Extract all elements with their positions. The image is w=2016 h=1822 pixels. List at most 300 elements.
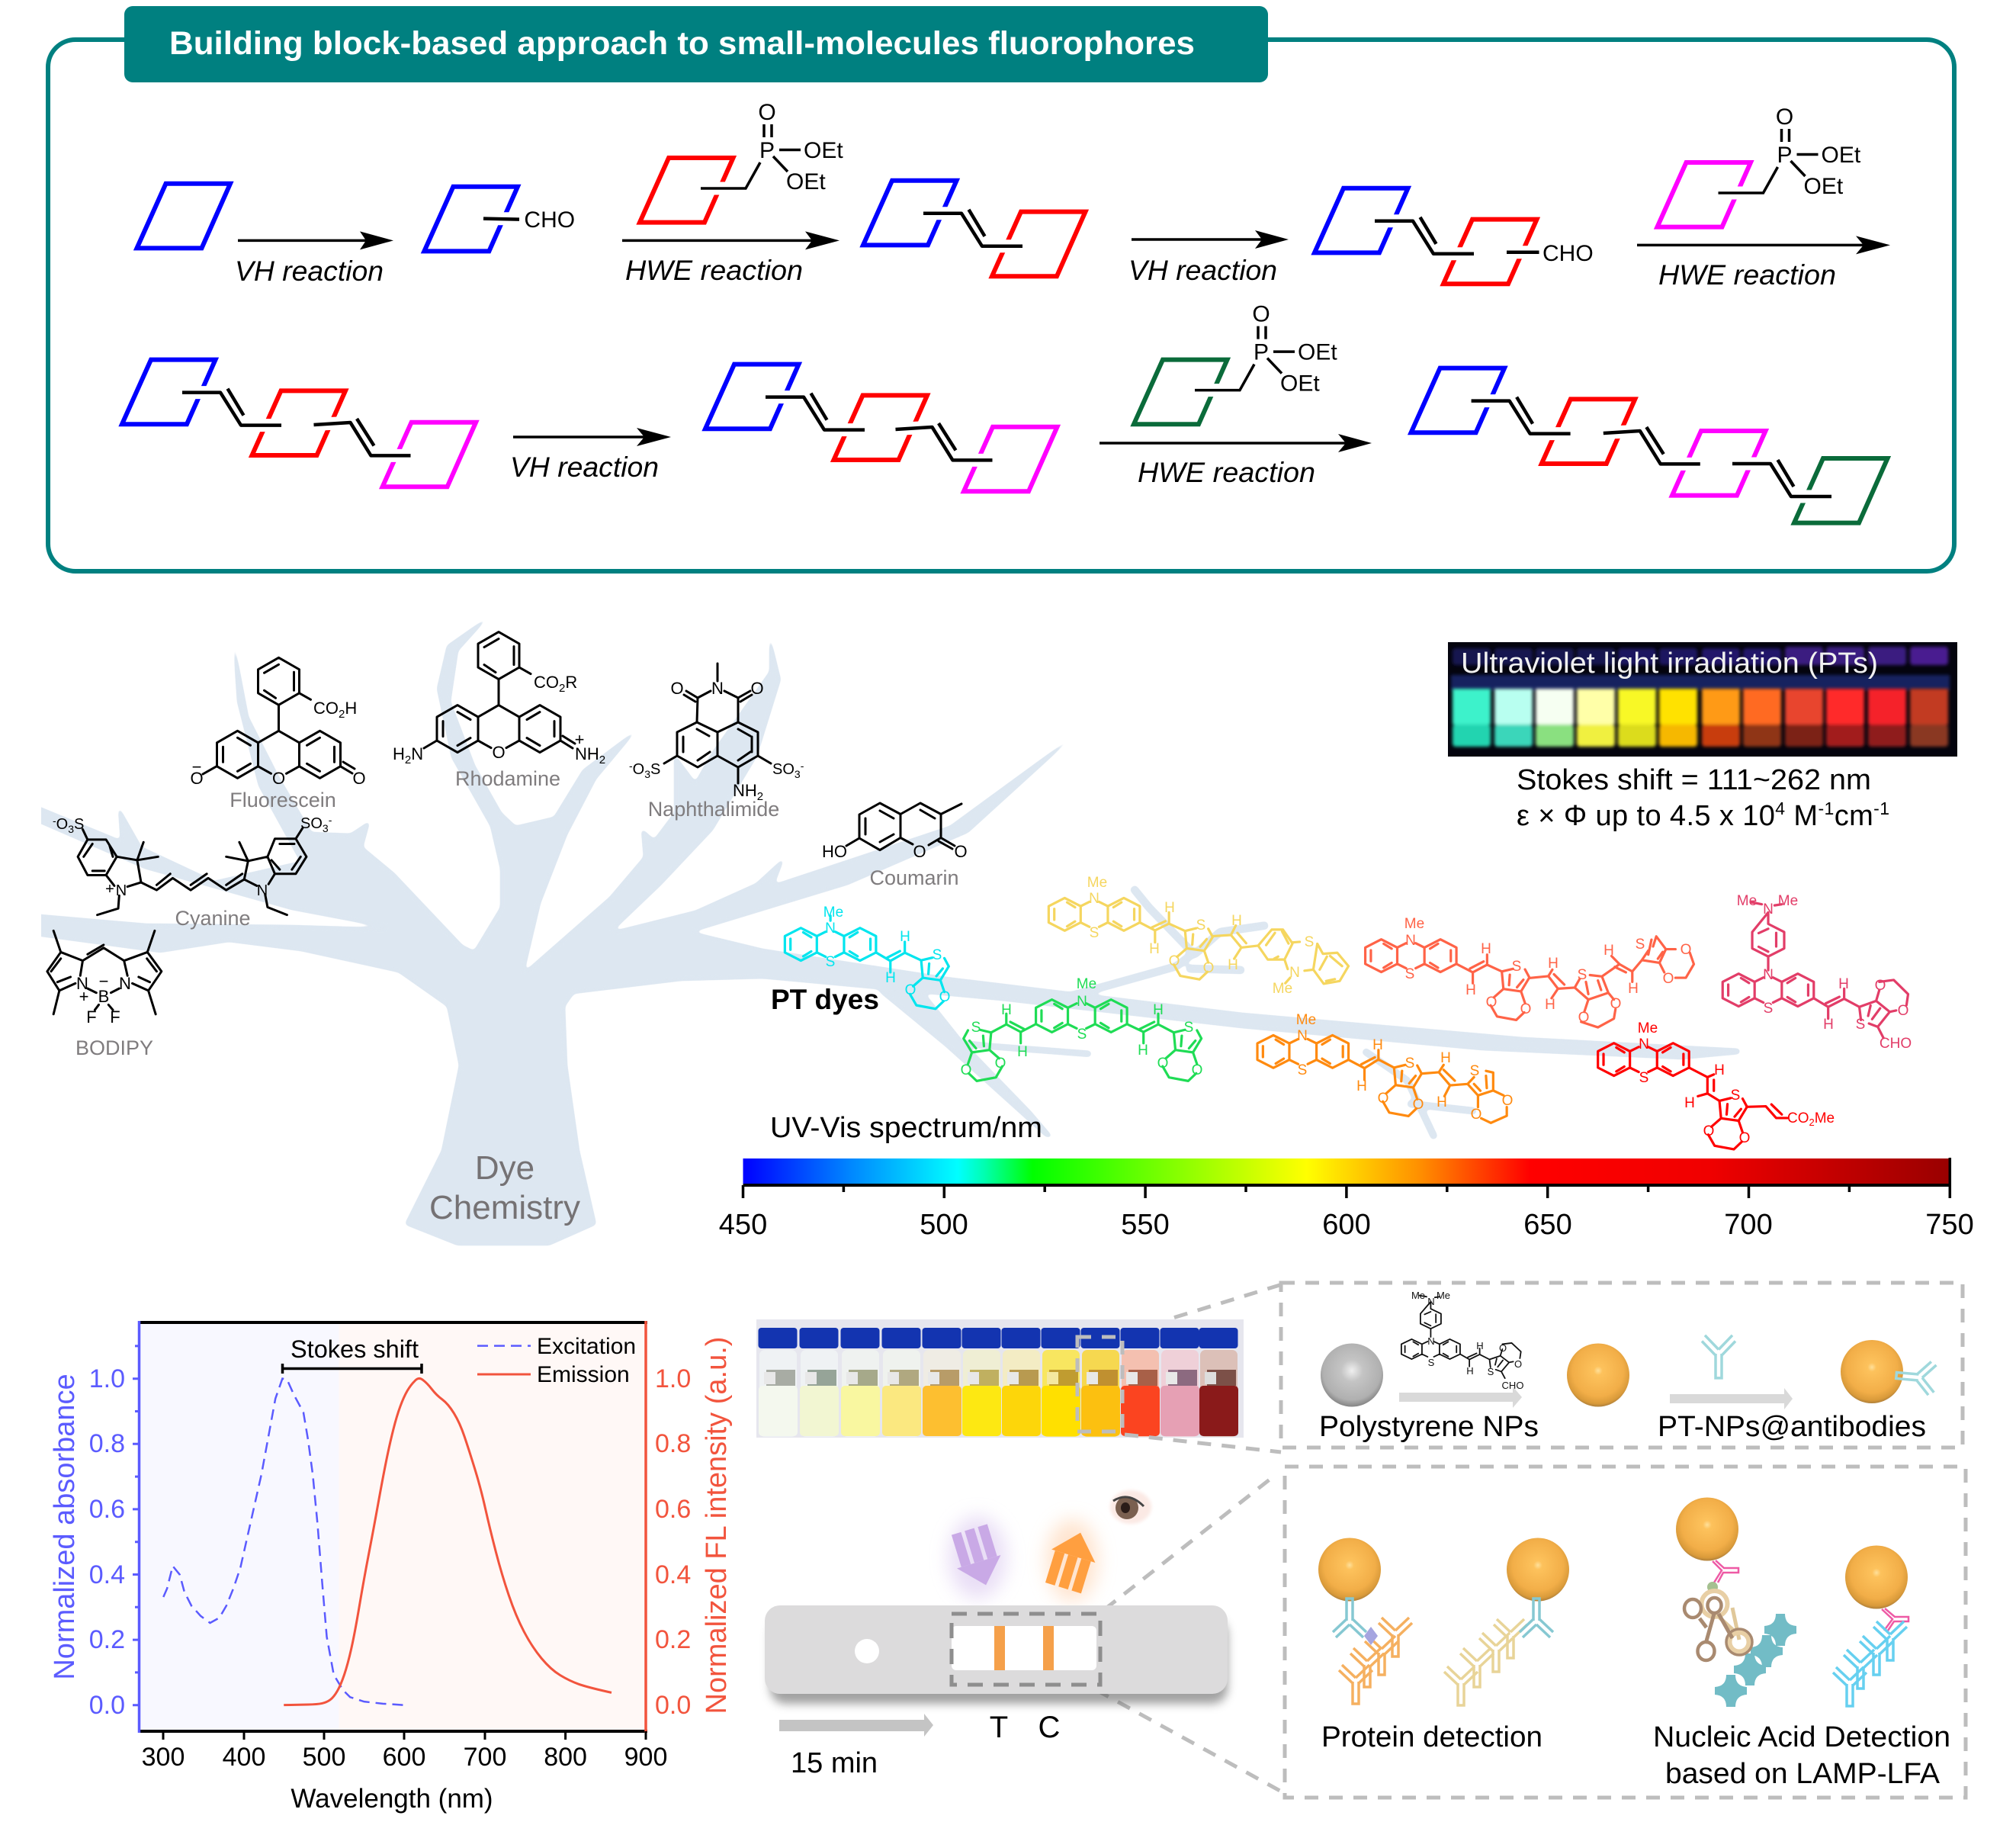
photo: vials under daylight [756,1319,1244,1438]
panel: nanoparticle preparation: PT-NPs@antibodies [1658,1411,1926,1443]
PT dye: yellow: H [1164,900,1175,916]
phosphonate reagent magenta [1658,104,1861,227]
test strip [765,1605,1228,1704]
panel: detection modes: Nucleic Acid Detection [1653,1721,1950,1753]
mini PT molecule: N [1427,1335,1435,1347]
PT dye: tomato: H [1628,981,1639,997]
molecule: cyanine: - [53,815,56,827]
phosphonate reagent green: OEt [1280,371,1320,397]
phosphonate reagent green [1134,302,1337,424]
legend [477,1334,636,1387]
PT dye: green: S [971,1020,981,1036]
arrow: HWE reaction 2: HWE reaction [1658,259,1836,291]
molecule: coumarin: O [954,842,968,861]
arrow: HWE reaction 3: HWE reaction [1138,457,1315,488]
left axis labels: 0.4 [89,1560,125,1589]
molecule: cyanine: Cyanine [175,907,251,930]
x axis labels: 800 [544,1743,587,1772]
PT dye: tomato: H [1548,956,1559,972]
x axis labels: 600 [383,1743,425,1772]
LAMP-LFA assemblies [1676,1498,1908,1707]
vial glass and liquid [759,1350,1238,1437]
PT dye: cyan: Me [823,905,843,921]
molecule: BODIPY: − [99,972,108,991]
PT dye: orange: N [1297,1028,1308,1044]
PT dye: yellow: S [1090,925,1099,941]
molecule: naphthalimide: - [801,760,804,772]
PT dye: green [961,976,1202,1081]
PT dye: green: S [1184,1020,1193,1036]
PT dye: yellow: O [1169,953,1180,969]
mini PT molecule [1401,1290,1523,1391]
panel: detection modes: Protein detection [1321,1721,1542,1753]
PT dye: red: N [1639,1036,1649,1052]
aldehyde block [424,187,575,251]
molecule: fluorescein: Fluorescein [230,789,336,811]
molecule: rhodamine: R [565,673,577,692]
text: photophysical data: 4 [1775,799,1785,818]
legend: Emission [537,1362,630,1387]
x axis labels: 300 [142,1743,185,1772]
PT dye: tomato: H [1603,943,1614,959]
panel: detection modes: based on LAMP-LFA [1665,1758,1941,1790]
PT dye: green: N [1077,994,1087,1010]
molecule: fluorescein: H [345,699,357,718]
colour bar scale: 750 [1925,1209,1974,1241]
arrow: HWE reaction 1 [622,231,839,286]
PT dye: orange: H [1356,1078,1367,1094]
PT dye: yellow: H [1149,941,1160,957]
control line C [1043,1626,1054,1670]
molecule: fluorescein [190,657,366,811]
PT dye: crimson: Me [1737,893,1757,909]
arrow: VH reaction 1 [235,231,393,287]
PT dye: crimson: H [1838,976,1849,992]
mini PT molecule: O [1499,1342,1507,1354]
PT dye: tomato: O [1681,942,1691,958]
arrow: VH reaction 3 [510,428,671,483]
glowing vials [1453,689,1948,747]
PT dye: cyan: S [826,954,835,970]
trimer [122,360,476,487]
molecule: naphthalimide: N [711,679,724,698]
LAMP product loops [1684,1591,1752,1660]
molecule: BODIPY: B [98,987,109,1006]
PT dye: green: O [995,1056,1006,1072]
label: Dye Chemistry: Chemistry [429,1189,580,1226]
PT dye: cyan [785,905,950,1009]
PT dye: tomato: S [1405,966,1414,982]
arrow: HWE reaction 3 [1099,434,1372,488]
PT dye: orange: S [1470,1063,1479,1079]
molecule: rhodamine: N [411,744,423,763]
right axis labels [655,1364,691,1720]
mini PT molecule: S [1488,1366,1494,1377]
molecule: coumarin: O [913,842,926,861]
mini PT molecule: Me [1411,1290,1425,1301]
molecule: rhodamine: 2 [405,754,411,766]
phosphonate reagent magenta: O [1776,104,1793,130]
excitation curve [163,1379,404,1705]
PT dye: orange [1257,1012,1513,1123]
PT dye: tomato: O [1578,1010,1589,1026]
text: photophysical data: cm [1835,800,1873,832]
phosphonate reagent red: OEt [786,169,826,194]
PT dye: red: O [1703,1123,1714,1139]
text: photophysical data: ε × Φ up to 4.5 x 10 [1517,800,1775,832]
label: PT dyes: PT dyes [771,984,879,1015]
sphere: PT-NP [1567,1344,1629,1406]
protein detection assemblies [1318,1538,1569,1705]
label: T line: T [990,1711,1008,1744]
reaction scheme row 1 [137,100,1890,291]
PT dye: crimson: S [1856,1017,1865,1033]
PT dye: tomato: H [1481,941,1491,957]
x axis labels [142,1743,667,1772]
PT dye: cyan: H [885,970,896,986]
chart: excitation and emission spectra [49,1321,733,1814]
vial glass tops [1451,675,1950,690]
PT dye: crimson [1722,893,1912,1052]
molecule: cyanine: 3 [323,822,329,834]
molecule: rhodamine: CO [534,673,559,692]
right axis labels: 0.8 [655,1429,691,1458]
pink antibody upper [1713,1560,1738,1583]
arrow: flow direction [779,1714,933,1737]
arrow: loading [1399,1387,1522,1408]
molecule: naphthalimide: 3 [644,768,650,780]
molecule: fluorescein: O [272,769,285,788]
text: photophysical data: Stokes shift = 111~262 nm [1517,764,1871,796]
sphere with antibody [1841,1340,1937,1403]
pink antibody lower [1882,1608,1908,1631]
molecule: rhodamine [393,632,605,790]
PT dye: tomato: O [1663,971,1674,987]
molecule: naphthalimide: S [650,761,660,778]
PT dye: green: H [1017,1044,1028,1060]
molecule: BODIPY [47,930,162,1059]
phosphonate reagent red: P [759,138,775,163]
PT dye: tomato: N [1405,933,1416,949]
right axis labels: 0.6 [655,1495,691,1524]
right axis labels: 0.0 [655,1691,691,1720]
molecule: cyanine [53,814,332,930]
molecule: fluorescein: 2 [339,708,345,721]
phosphonate reagent green: P [1254,340,1269,365]
molecule: cyanine: - [329,814,332,826]
molecule: cyanine: O [56,816,68,833]
arrow: VH reaction 2 [1128,230,1289,286]
right axis labels: 0.4 [655,1560,691,1589]
molecule: rhodamine: H [393,744,405,763]
dimer [863,181,1086,276]
mini PT molecule: O [1514,1358,1522,1370]
PT dye: tomato: S [1636,937,1645,953]
PT dye: yellow [1048,875,1349,997]
PT dye: crimson: CHO [1880,1036,1912,1052]
right axis labels: 0.2 [655,1625,691,1654]
molecule: cyanine: N [116,882,127,899]
aldehyde block: CHO [524,207,575,233]
panel: detection modes [1285,1467,1966,1798]
left axis labels: 0.8 [89,1429,125,1458]
molecule: rhodamine: 2 [559,682,565,695]
PT dye: crimson: N [1763,901,1774,917]
right axis title: Normalized FL intensity (a.u.) [701,1337,733,1714]
molecule: cyanine: + [105,881,114,898]
title banner [124,6,1268,82]
PT dye: tomato: Me [1404,916,1424,932]
callout zoom lines [1077,1284,1285,1794]
molecule: BODIPY: + [79,987,88,1006]
left axis labels: 0.2 [89,1625,125,1654]
dimer aldehyde [1315,188,1594,284]
PT dye: cyan: O [905,982,916,998]
molecule: BODIPY: N [119,974,131,993]
PT dye: orange: H [1372,1037,1383,1053]
PT dye: tomato: O [1486,995,1497,1011]
right axis labels: 1.0 [655,1364,691,1393]
colour bar scale: 600 [1322,1209,1371,1241]
PT dye: yellow: H [1231,913,1242,929]
vial caps [1453,647,1948,665]
molecule: naphthalimide [629,664,804,821]
PT dye: orange: O [1378,1091,1388,1107]
left axis ticks [133,1346,139,1705]
trimer 2 [705,365,1057,491]
x axis ticks [163,1731,646,1740]
molecule: rhodamine: NH [575,744,599,763]
icon: emission arrow [1042,1519,1103,1602]
PT dye: yellow: S [1305,934,1314,950]
molecule: fluorescein: O [352,769,366,788]
molecule: BODIPY: BODIPY [75,1036,153,1059]
molecule: cyanine: SO [300,815,323,832]
icon: eye [1110,1490,1151,1524]
blue building block [137,184,230,248]
PT dye: tomato [1366,916,1694,1027]
PT dye: red: CO [1787,1110,1809,1126]
PT dye: green: H [1001,1002,1012,1018]
phosphonate reagent green: OEt [1298,340,1337,365]
left axis labels: 0.6 [89,1495,125,1524]
PT dye: green: O [1157,1056,1168,1072]
molecule: BODIPY: F [86,1007,97,1027]
PT dye: yellow: S [1196,917,1205,933]
mini PT molecule: Me [1437,1290,1450,1301]
molecule: BODIPY: F [110,1007,120,1027]
icon: antibody [1702,1335,1735,1378]
dimer aldehyde: CHO [1542,241,1594,266]
PT dye: cyan: H [900,929,910,945]
phosphonate reagent magenta: OEt [1821,143,1861,168]
colour bar scale: 450 [719,1209,767,1241]
PT dye: tomato: O [1610,996,1621,1012]
PT dye: cyan: N [825,921,836,937]
PT dye: orange: O [1502,1093,1513,1109]
molecule: fluorescein: − [192,757,201,776]
PT dye: red: 2 [1809,1117,1815,1128]
x axis labels: 400 [223,1743,265,1772]
PT dye: red: Me [1638,1020,1658,1036]
arrow: HWE reaction 1: HWE reaction [625,255,803,286]
PT dye: yellow: Me [1273,981,1292,997]
x axis labels: 500 [303,1743,345,1772]
PT dye: orange: O [1471,1107,1482,1123]
PT dye: green: S [1077,1027,1087,1043]
PT dye: red: Me [1815,1110,1835,1126]
panel: nanoparticle preparation [1281,1283,1963,1448]
test line T [994,1626,1005,1670]
molecule: fluorescein: O [190,769,204,788]
molecule: naphthalimide: - [629,760,633,772]
x axis labels: 700 [464,1743,506,1772]
PT dye: crimson: S [1764,1001,1773,1017]
PT dye: yellow: H [1228,957,1238,973]
molecule: rhodamine: Rhodamine [455,767,560,790]
photo: vials under ultraviolet light [1448,642,1957,757]
PT dye: tomato: O [1520,1001,1531,1017]
colour bar scale: 700 [1724,1209,1773,1241]
colour bar scale: 550 [1121,1209,1170,1241]
molecule: naphthalimide: O [670,679,684,698]
stokes shift bracket [282,1335,422,1374]
PT dye: red: H [1714,1062,1725,1078]
PT dye: tomato: H [1545,997,1555,1013]
PT dye: tomato: S [1578,967,1587,983]
molecule: naphthalimide: O [633,761,644,778]
colour bar scale: 500 [920,1209,968,1241]
mini PT molecule: H [1466,1365,1474,1377]
molecule: rhodamine: + [575,730,584,749]
panel: building block frame [48,40,1954,571]
label: 15 min: 15 min [791,1747,878,1779]
PT dye: cyan: S [933,947,942,963]
left axis labels [89,1364,125,1720]
mini PT molecule: H [1476,1340,1484,1351]
molecule: coumarin [822,803,968,889]
molecule: naphthalimide: Naphthalimide [648,798,779,821]
label: Dye Chemistry: Dye [475,1149,534,1187]
x axis title: Wavelength (nm) [291,1784,493,1814]
left axis title: Normalized absorbance [49,1374,81,1680]
left axis labels: 1.0 [89,1364,125,1393]
arrow: VH reaction 2: VH reaction [1128,255,1277,286]
text: photophysical data: -1 [1873,799,1889,818]
text: photophysical data [1517,764,1889,832]
label: UV-Vis spectrum: UV-Vis spectrum/nm [770,1112,1042,1144]
colour bar scale: 650 [1523,1209,1572,1241]
PT dye: yellow: N [1289,965,1300,981]
PT dye: yellow: N [1089,891,1099,907]
molecule: cyanine: N [257,882,268,899]
phosphonate reagent red [640,100,843,223]
text: photophysical data: M [1785,800,1818,832]
molecule: cyanine: S [74,816,84,833]
mini PT molecule: N [1427,1296,1435,1307]
molecule: naphthalimide: 2 [757,790,763,803]
PT dye: yellow: Me [1087,875,1107,891]
sphere: polystyrene [1321,1344,1383,1406]
mini PT molecule: S [1428,1357,1435,1368]
reaction scheme row 2 [122,302,1888,523]
title banner: Building block-based approach to small-molecules fluorophores [169,25,1195,62]
molecule: BODIPY: N [76,974,88,993]
PT dye: red: O [1739,1130,1750,1146]
molecule: fluorescein: CO [313,699,339,718]
PT dye: green: H [1138,1043,1148,1059]
PT dye: green: Me [1077,976,1096,992]
dye chemistry tree [30,619,1739,1245]
PT dye: crimson: H [1823,1017,1834,1033]
PT dye: red [1598,1020,1835,1149]
phosphonate reagent green: O [1252,302,1270,327]
PT dye: yellow: O [1203,960,1214,976]
stokes shift bracket: Stokes shift [291,1335,419,1363]
arrow: conjugation [1670,1388,1793,1409]
phosphonate reagent magenta: OEt [1804,174,1844,199]
x axis labels: 900 [624,1743,667,1772]
PT dye: red: S [1639,1070,1648,1086]
PT dye: crimson: O [1875,978,1886,994]
label: C line: C [1038,1711,1060,1744]
PT dye: red: H [1684,1095,1695,1111]
PT dye: orange: S [1298,1062,1307,1078]
molecule: coumarin: HO [822,842,847,861]
colour bar scale [719,1158,1974,1241]
PT dye: green: O [961,1062,971,1078]
PT dye: crimson: O [1898,1003,1908,1019]
vial caps [758,1328,1238,1348]
PT dye: orange: H [1440,1050,1451,1066]
arrow: VH reaction 3: VH reaction [510,451,659,483]
molecule: cyanine: 3 [68,823,74,835]
PT dye: tomato: S [1512,959,1521,975]
PT dye: crimson: N [1763,967,1774,983]
legend: Excitation [537,1334,636,1359]
photo: vials under ultraviolet light: Ultraviolet light irradiation (PTs) [1461,648,1878,680]
teal capture probes [1715,1614,1796,1707]
PT dye: orange: Me [1296,1012,1316,1028]
panel: nanoparticle preparation: Polystyrene NPs [1319,1411,1539,1443]
PT dye: crimson: Me [1778,893,1798,909]
phosphonate reagent red: OEt [804,138,843,163]
molecule: rhodamine: 2 [599,754,605,766]
PT dye: orange: H [1437,1094,1447,1110]
PT dye: tomato: H [1465,982,1476,998]
PT dye: orange: O [1413,1097,1424,1113]
PT dye: cyan: O [939,989,950,1005]
left axis labels: 0.0 [89,1691,125,1720]
molecule: naphthalimide: O [750,679,764,698]
molecule: naphthalimide: SO [772,761,795,778]
PT dye: orange: S [1405,1056,1414,1072]
phosphonate reagent red: O [758,100,776,125]
tetramer [1411,368,1888,523]
PT dye: red: S [1731,1088,1740,1104]
molecule: coumarin: Coumarin [869,866,959,889]
phosphonate reagent magenta: P [1777,143,1793,168]
PT dye: green: O [1192,1062,1202,1078]
emission curve [284,1378,612,1705]
PT dye: green: H [1153,1002,1164,1018]
molecule: naphthalimide: NH [733,781,757,800]
mini PT molecule: CHO [1502,1380,1523,1391]
text: photophysical data: -1 [1818,799,1834,818]
arrow: VH reaction 1: VH reaction [235,255,384,287]
molecule: rhodamine: O [492,743,506,762]
arrow: HWE reaction 2 [1637,236,1890,291]
